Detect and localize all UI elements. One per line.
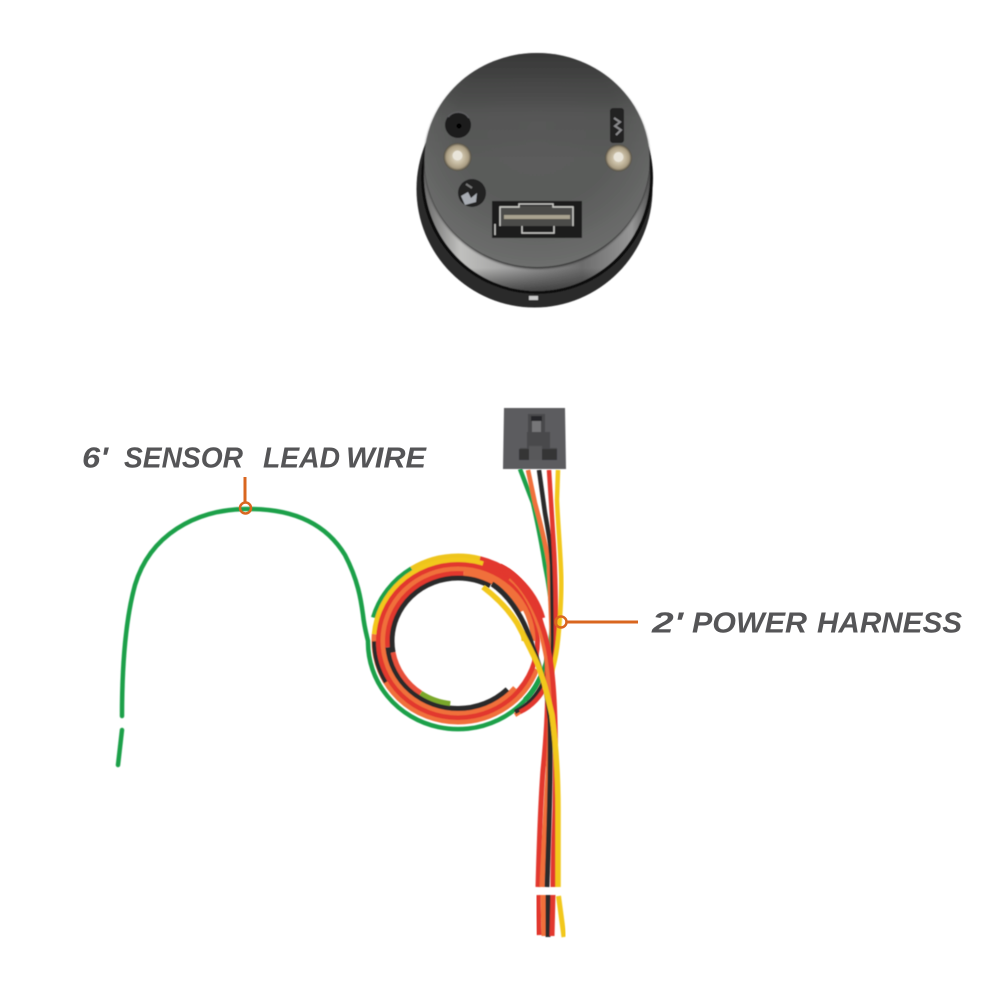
callout: sensor lead wire: 6' <box>82 442 109 474</box>
gauge outer rim <box>416 70 652 308</box>
inner orange strand <box>388 574 528 708</box>
main orange strand <box>383 569 533 713</box>
callout: sensor lead wire: WIRE <box>346 442 427 474</box>
inner black strand <box>392 578 524 704</box>
harness connector plug <box>503 408 566 469</box>
red strand at rim <box>374 560 542 722</box>
right stud <box>605 144 632 172</box>
yellow tail <box>483 587 558 887</box>
wire stripped ends <box>538 895 564 937</box>
power harness upper wires <box>515 469 561 715</box>
callout: power harness: 2' <box>651 608 685 640</box>
red upper strand <box>388 574 528 708</box>
right red tail <box>505 571 556 887</box>
power harness tails <box>483 566 558 887</box>
gauge rear face <box>424 53 650 267</box>
rear switch slot <box>610 108 624 143</box>
sensor lead wire <box>118 509 540 765</box>
inner olive strand <box>392 578 524 704</box>
callout: sensor lead wire <box>82 442 427 514</box>
screw hole <box>445 112 471 138</box>
rim notch <box>529 296 538 300</box>
callout: sensor lead wire: SENSOR <box>124 442 243 474</box>
inner red strand <box>392 578 524 704</box>
black lower strand <box>388 574 528 708</box>
outer yellow strand <box>370 556 546 726</box>
left black strand <box>374 560 542 722</box>
connector socket <box>492 201 582 238</box>
gauge face shadow <box>424 54 650 268</box>
callout: sensor lead wire: LEAD <box>263 442 340 474</box>
left red tail <box>500 566 548 887</box>
left stud <box>444 143 472 171</box>
lower adjustment hole <box>458 179 486 207</box>
outer red strand <box>370 556 546 726</box>
upper-left green strand <box>370 556 546 726</box>
callout: power harness: HARNESS <box>817 608 962 640</box>
orange tail <box>510 578 550 887</box>
callout: power harness <box>556 608 962 640</box>
inner yellow strand <box>392 578 524 704</box>
orange strand <box>374 560 542 722</box>
callout: power harness: POWER <box>692 608 807 640</box>
black tail <box>492 584 550 887</box>
gauge body side <box>421 61 653 294</box>
main red strand <box>378 564 538 718</box>
wire coil <box>370 556 546 726</box>
gauge back <box>416 53 653 308</box>
yellow strand <box>374 560 542 722</box>
